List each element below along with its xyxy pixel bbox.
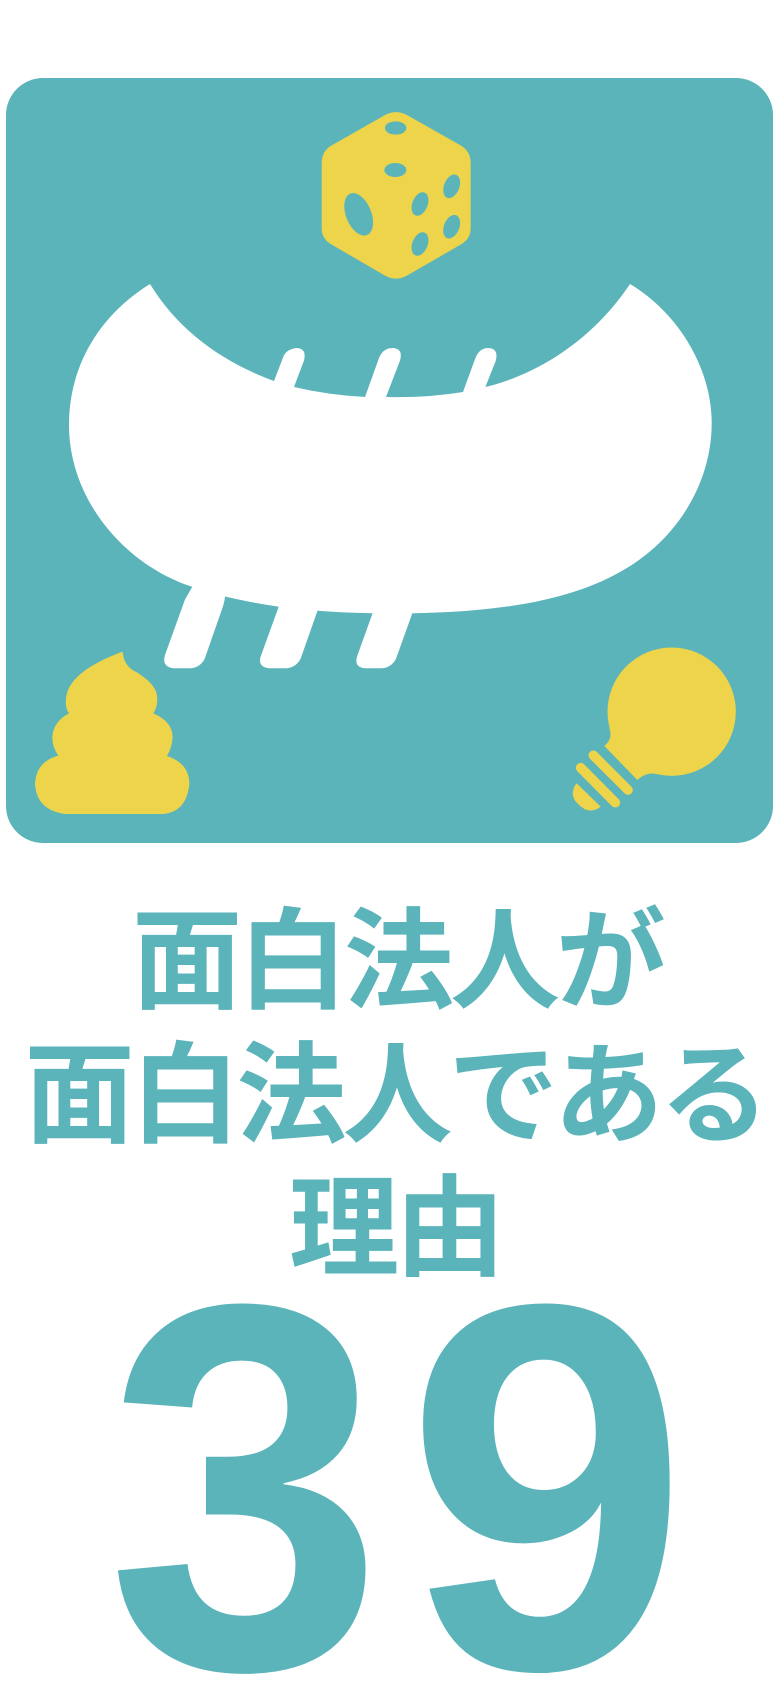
heading: title text: 面白法人が	[132, 901, 664, 1024]
heading: title text	[25, 901, 765, 1291]
panel: teal card with icons	[6, 78, 773, 843]
number: 39	[107, 1196, 689, 1700]
heading: title text: 面白法人である	[25, 1035, 765, 1158]
icon: canoe with paddles	[69, 284, 712, 668]
icon: light bulb	[573, 647, 736, 811]
heading: title text: 理由	[289, 1168, 501, 1291]
icon: dice	[322, 112, 471, 279]
icon: poop	[35, 652, 189, 814]
